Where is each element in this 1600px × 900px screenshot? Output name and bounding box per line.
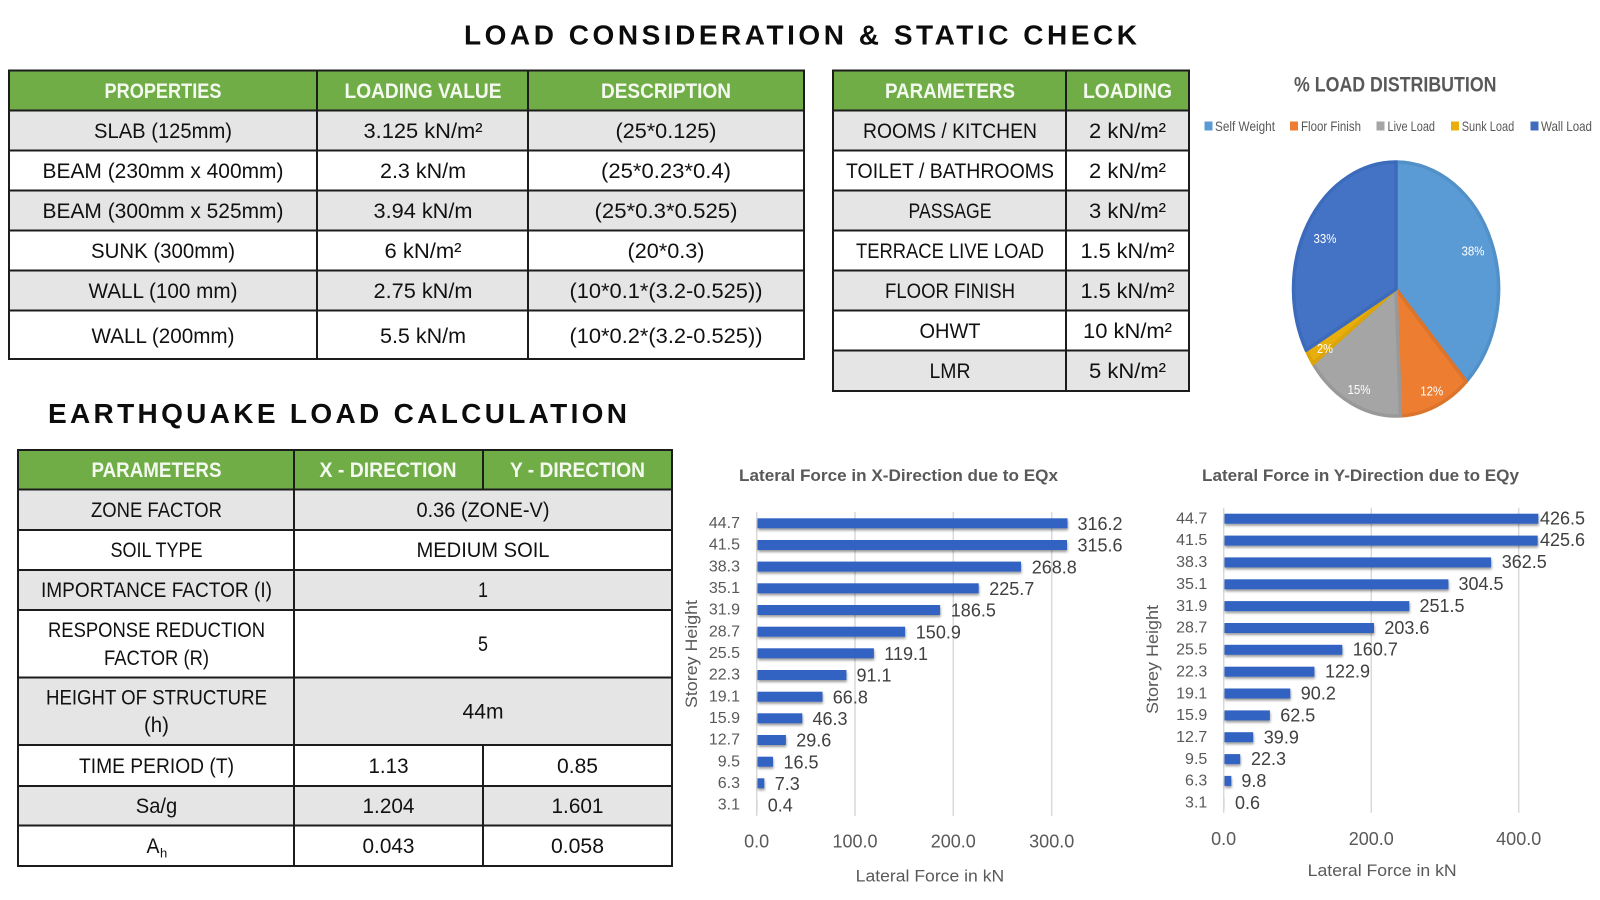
row: height of structure: HEIGHT OF STRUCTURE <box>46 686 267 710</box>
storey height categories: 15.9 <box>1176 707 1207 724</box>
y-axis title: Storey Height <box>1143 605 1162 714</box>
row: beam 300: (25*0.3*0.525) <box>594 200 738 223</box>
pie chart: percent load distribution <box>1204 74 1592 416</box>
storey height categories: 25.5 <box>1176 642 1207 658</box>
header row <box>9 70 804 110</box>
x-axis ticks <box>744 832 1074 852</box>
header row: X - DIRECTION <box>320 459 456 482</box>
pie title: % LOAD DISTRIBUTION <box>1294 74 1496 96</box>
storey height categories: 35.1 <box>709 580 740 597</box>
storey height categories: 3.1 <box>718 797 740 814</box>
row: rooms / kitchen: ROOMS / KITCHEN <box>863 120 1037 143</box>
row: wall 200: WALL (200mm) <box>92 325 234 348</box>
x-axis title: Lateral Force in kN <box>1308 861 1457 880</box>
table: parameters and live loading <box>833 70 1189 391</box>
y-axis title: Storey Height <box>682 600 701 708</box>
row: beam 230: 2.3 kN/m <box>380 160 466 183</box>
legend: Floor Finish <box>1301 118 1361 134</box>
row: wall 100: 2.75 kN/m <box>374 280 472 303</box>
row: wall 200 <box>92 325 762 348</box>
pie percentage labels: 2% <box>1317 341 1333 356</box>
storey height categories: 38.3 <box>709 558 740 575</box>
header row: LOADING <box>1083 80 1172 103</box>
value labels: 0.6 <box>1235 793 1260 813</box>
value labels: 122.9 <box>1325 662 1370 682</box>
storey height categories: 28.7 <box>1176 620 1207 637</box>
x-axis ticks: 200.0 <box>1349 829 1394 849</box>
header row: PARAMETERS <box>885 80 1015 103</box>
value labels: 22.3 <box>1251 749 1286 769</box>
legend <box>1204 118 1592 134</box>
row: response reduction factor: FACTOR (R) <box>104 647 209 670</box>
row: beam 230 <box>42 160 731 183</box>
bar chart: lateral force in x-direction <box>682 466 1123 886</box>
row: slab: SLAB (125mm) <box>94 120 232 143</box>
row: sa/g: 1.204 <box>362 795 415 818</box>
x-axis ticks <box>1211 829 1541 849</box>
legend: Sunk Load <box>1462 118 1514 134</box>
storey height categories: 3.1 <box>1185 795 1207 812</box>
table: earthquake parameters <box>18 450 672 866</box>
value labels: 16.5 <box>784 752 819 772</box>
pie percentage labels: 15% <box>1348 382 1371 397</box>
pie percentage labels: 12% <box>1420 384 1444 398</box>
row: sa/g <box>18 786 672 826</box>
value labels: 91.1 <box>856 666 892 686</box>
row: slab <box>9 110 804 150</box>
storey height categories <box>709 515 740 814</box>
row: sunk: (20*0.3) <box>628 240 704 263</box>
header row: Y - DIRECTION <box>510 459 645 482</box>
row: passage: PASSAGE <box>908 200 992 223</box>
row: importance factor <box>18 570 672 610</box>
value labels: 425.6 <box>1540 530 1585 550</box>
bars <box>758 518 1068 810</box>
x-axis ticks: 200.0 <box>931 832 976 852</box>
storey height categories: 6.3 <box>1185 773 1207 790</box>
chart title: Lateral Force in X-Direction due to EQx <box>739 466 1059 485</box>
value labels: 304.5 <box>1458 574 1504 594</box>
x-axis ticks: 400.0 <box>1496 829 1541 849</box>
row: soil type: MEDIUM SOIL <box>416 539 550 562</box>
row: beam 300: 3.94 kN/m <box>374 200 472 223</box>
pie percentage labels <box>1314 231 1485 398</box>
row: sunk: 6 kN/m² <box>384 240 462 263</box>
row: terrace live load <box>856 240 1175 263</box>
row: terrace live load: TERRACE LIVE LOAD <box>856 240 1044 263</box>
row: floor finish: FLOOR FINISH <box>885 280 1015 303</box>
row: toilet / bathrooms: TOILET / BATHROOMS <box>846 160 1054 183</box>
storey height categories: 12.7 <box>1176 729 1207 746</box>
value labels <box>768 514 1123 816</box>
row: wall 100: WALL (100 mm) <box>88 280 238 303</box>
row: sa/g: Sa/g <box>136 795 177 818</box>
bar chart: lateral force in y-direction <box>1143 466 1585 880</box>
value labels: 251.5 <box>1420 596 1465 616</box>
value labels: 160.7 <box>1353 640 1398 660</box>
storey height categories: 28.7 <box>709 623 740 640</box>
row: ah: 0.043 <box>362 835 414 858</box>
storey height categories: 44.7 <box>1176 510 1207 527</box>
header row: PROPERTIES <box>104 80 222 103</box>
value labels: 7.3 <box>775 774 800 794</box>
row: slab: (25*0.125) <box>616 120 716 143</box>
x-axis ticks: 300.0 <box>1029 832 1074 852</box>
row: sunk <box>91 240 704 263</box>
row: floor finish: 1.5 kN/m² <box>1080 280 1175 303</box>
row: slab: 3.125 kN/m² <box>364 120 483 143</box>
pie percentage labels: 38% <box>1462 244 1485 258</box>
row: wall 100 <box>9 270 804 310</box>
storey height categories: 12.7 <box>709 732 740 749</box>
row: response reduction factor <box>48 619 488 670</box>
row: ah: h <box>160 846 167 860</box>
value labels: 316.2 <box>1078 514 1123 534</box>
row: sunk: SUNK (300mm) <box>91 240 235 263</box>
row: passage <box>833 190 1189 230</box>
legend: Self Weight <box>1215 118 1275 134</box>
storey height categories: 41.5 <box>709 537 740 554</box>
storey height categories: 15.9 <box>709 710 740 727</box>
row: time period: TIME PERIOD (T) <box>79 755 234 778</box>
storey height categories: 6.3 <box>718 775 740 792</box>
row: time period: 0.85 <box>557 755 598 778</box>
row: beam 300: BEAM (300mm x 525mm) <box>42 200 284 223</box>
value labels: 62.5 <box>1280 705 1315 725</box>
value labels: 90.2 <box>1301 684 1336 704</box>
value labels: 46.3 <box>812 709 848 729</box>
row: importance factor: IMPORTANCE FACTOR (I) <box>41 579 272 602</box>
row: toilet / bathrooms: 2 kN/m² <box>1089 160 1166 183</box>
row: ohwt: 10 kN/m² <box>1083 320 1172 343</box>
row: time period <box>79 755 598 778</box>
storey height categories: 9.5 <box>1185 751 1207 768</box>
row: terrace live load: 1.5 kN/m² <box>1080 240 1175 263</box>
pie percentage labels: 33% <box>1314 231 1337 246</box>
storey height categories: 38.3 <box>1176 554 1207 571</box>
storey height categories: 35.1 <box>1176 576 1207 593</box>
table: properties and loading values <box>9 70 804 359</box>
value labels: 426.5 <box>1540 508 1585 528</box>
row: ohwt <box>920 320 1172 343</box>
row: rooms / kitchen: 2 kN/m² <box>1089 120 1166 143</box>
header row: DESCRIPTION <box>601 80 731 103</box>
value labels <box>1235 508 1585 813</box>
value labels: 9.8 <box>1241 771 1266 791</box>
row: beam 300 <box>9 190 804 230</box>
row: height of structure <box>18 678 672 745</box>
storey height categories: 9.5 <box>718 753 740 770</box>
row: zone factor: 0.36 (ZONE-V) <box>416 499 550 522</box>
x-axis title: Lateral Force in kN <box>856 867 1004 886</box>
row: ah: A <box>146 835 160 858</box>
value labels: 268.8 <box>1032 557 1077 577</box>
row: sa/g: 1.601 <box>552 795 604 818</box>
legend: Live Load <box>1388 118 1435 134</box>
row: passage: 3 kN/m² <box>1089 200 1166 223</box>
storey height categories: 19.1 <box>1176 685 1207 702</box>
value labels: 66.8 <box>833 687 868 707</box>
value labels: 186.5 <box>951 601 996 621</box>
storey height categories: 22.3 <box>1176 663 1207 680</box>
pie slices <box>1294 162 1499 416</box>
storey height categories: 44.7 <box>709 515 740 532</box>
value labels: 29.6 <box>796 731 831 751</box>
storey height categories: 41.5 <box>1176 532 1207 549</box>
row: zone factor: ZONE FACTOR <box>91 499 222 522</box>
row: height of structure: (h) <box>144 714 169 737</box>
value labels: 315.6 <box>1078 536 1123 556</box>
row: beam 230: BEAM (230mm x 400mm) <box>42 160 284 183</box>
row: ah <box>146 835 604 860</box>
value labels: 225.7 <box>989 579 1034 599</box>
row: zone factor <box>18 490 672 530</box>
row: ah: 0.058 <box>551 835 604 858</box>
row: wall 200: (10*0.2*(3.2-0.525)) <box>570 325 762 348</box>
title: earthquake load calculation: EARTHQUAKE LOAD CALCULATION <box>48 398 627 429</box>
storey height categories <box>1176 510 1207 812</box>
row: lmr <box>833 350 1189 391</box>
row: lmr: 5 kN/m² <box>1089 360 1166 383</box>
header row <box>833 70 1189 110</box>
row: lmr: LMR <box>930 360 970 383</box>
value labels: 39.9 <box>1264 727 1299 747</box>
value labels: 203.6 <box>1384 618 1429 638</box>
row: ohwt: OHWT <box>920 320 981 343</box>
row: time period: 1.13 <box>368 755 408 778</box>
storey height categories: 31.9 <box>709 602 740 619</box>
value labels: 150.9 <box>916 622 961 642</box>
row: rooms / kitchen <box>833 110 1189 150</box>
storey height categories: 19.1 <box>709 688 740 705</box>
row: height of structure: 44m <box>462 700 504 724</box>
header row <box>18 450 672 490</box>
value labels: 362.5 <box>1502 552 1547 572</box>
bars <box>1224 514 1538 808</box>
row: floor finish <box>833 270 1189 310</box>
row: response reduction factor: 5 <box>478 633 488 656</box>
storey height categories: 25.5 <box>709 645 740 662</box>
x-axis ticks: 0.0 <box>1211 829 1236 849</box>
row: soil type: SOIL TYPE <box>110 539 202 562</box>
row: importance factor: 1 <box>478 579 488 602</box>
x-axis ticks: 0.0 <box>744 832 769 852</box>
row: wall 100: (10*0.1*(3.2-0.525)) <box>570 280 762 303</box>
storey height categories: 31.9 <box>1176 598 1207 615</box>
title: load consideration and static check: LOAD CONSIDERATION & STATIC CHECK <box>464 20 1137 50</box>
row: response reduction factor: RESPONSE REDUCTION <box>48 619 265 642</box>
row: soil type <box>110 539 550 562</box>
row: beam 230: (25*0.23*0.4) <box>601 160 731 183</box>
chart title: Lateral Force in Y-Direction due to EQy <box>1202 466 1520 485</box>
header row: PARAMETERS <box>92 459 222 482</box>
x-axis ticks: 100.0 <box>832 832 878 852</box>
storey height categories: 22.3 <box>709 667 740 684</box>
row: wall 200: 5.5 kN/m <box>380 325 466 348</box>
value labels: 0.4 <box>768 796 793 816</box>
header row: LOADING VALUE <box>344 80 502 103</box>
value labels: 119.1 <box>884 644 928 664</box>
